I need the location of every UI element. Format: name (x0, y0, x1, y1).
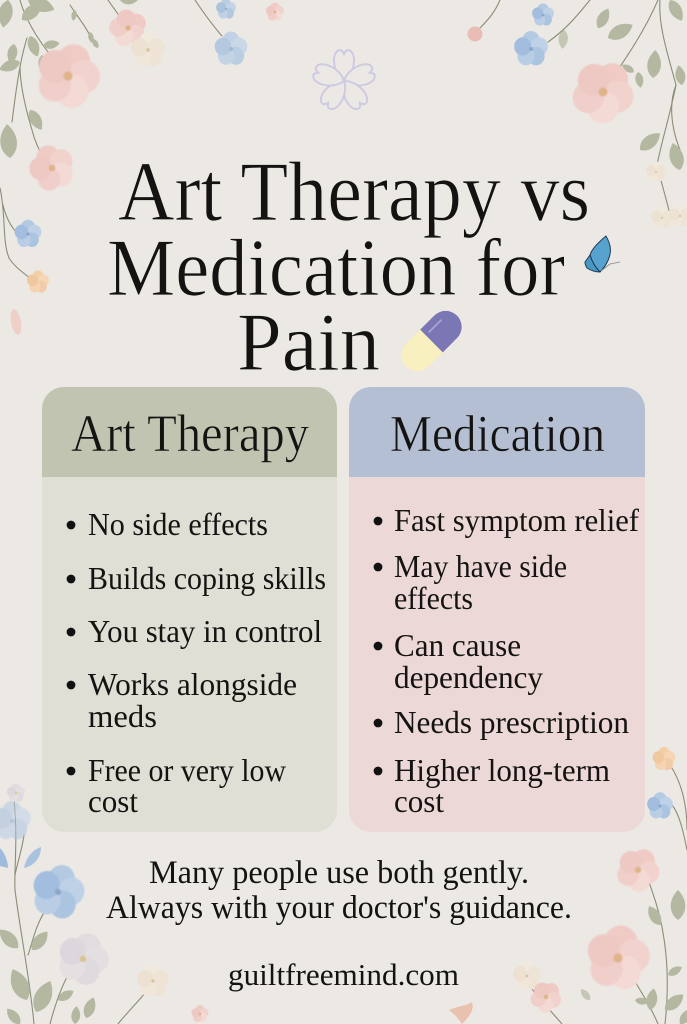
heading: medication: Medication (390, 406, 605, 463)
list: art therapy benefits: Free or very low (88, 752, 286, 788)
icon: pill capsule (395, 304, 468, 378)
flower: large pink right (562, 49, 646, 133)
flower: small blue bud (532, 3, 554, 26)
icon: outline flower (311, 50, 377, 112)
floral corner: bottom left (0, 783, 209, 1024)
flower: small pink (191, 1005, 209, 1022)
title (107, 145, 590, 388)
flower: orange (27, 270, 49, 293)
flower: cream (513, 961, 541, 989)
flower: cream edge (669, 204, 687, 227)
petal: pink (9, 308, 23, 336)
panel header: medication (349, 387, 645, 477)
list: medication traits: May have side (394, 548, 567, 584)
list: art therapy benefits: You stay in control (88, 613, 322, 649)
list: art therapy benefits: Works alongside (88, 666, 297, 702)
list: medication traits: dependency (394, 659, 543, 695)
list: medication traits: Fast symptom relief (394, 502, 639, 538)
title: Medication for (107, 222, 565, 313)
flower: pink small (525, 975, 568, 1018)
flower: small pink (23, 138, 80, 195)
flower: blue left edge (15, 220, 41, 247)
list: art therapy benefits: meds (88, 698, 157, 734)
title: Art Therapy vs (118, 145, 590, 239)
flower: small pink bud (468, 26, 482, 42)
bud: blue (558, 30, 569, 49)
icon: butterfly (585, 236, 620, 272)
bud: blue (24, 847, 41, 868)
floral corner: top right (468, 0, 687, 229)
panel: medication (349, 387, 645, 832)
list: art therapy benefits: No side effects (88, 506, 268, 542)
website url: guiltfreemind.com (228, 957, 459, 992)
flower: blue (647, 792, 673, 818)
heading: art therapy: Art Therapy (71, 405, 309, 463)
flower: pink large (582, 920, 655, 993)
flower: orange (653, 747, 675, 770)
list: art therapy benefits: Builds coping skills (88, 560, 326, 596)
flower: large pink (28, 34, 109, 115)
bud: blue edge (0, 848, 8, 868)
flower: tiny pink (266, 2, 284, 21)
flower: top pink (104, 3, 154, 52)
panel body: medication (349, 477, 645, 832)
list: art therapy benefits: cost (88, 783, 138, 819)
title: Pain (237, 296, 380, 388)
closing message: Always with your doctor's guidance. (106, 890, 572, 926)
flower: cream bud (646, 161, 666, 182)
flower: blue (27, 859, 90, 923)
flower: top cream (7, 783, 25, 802)
closing message (106, 855, 572, 926)
flower: pink upper (610, 840, 667, 898)
flower: blue (514, 31, 548, 65)
floral corner: bottom right (449, 747, 687, 1024)
flower: cream (137, 964, 169, 996)
list: medication traits: Higher long-term (394, 752, 610, 788)
list: medication traits: Needs prescription (394, 704, 629, 740)
list: art therapy benefits (67, 506, 326, 819)
list: medication traits (374, 502, 639, 819)
list: medication traits: Can cause (394, 627, 521, 663)
panel body: art therapy (42, 477, 337, 832)
floral corner: top left (0, 0, 284, 336)
flower: lavender white (51, 925, 116, 990)
flower: pale blue (215, 32, 247, 65)
list: medication traits: effects (394, 580, 473, 616)
flower: small blue (216, 0, 236, 19)
panel header: art therapy (42, 387, 337, 477)
panel: art therapy (42, 387, 337, 832)
flower: cream pair (651, 206, 673, 229)
flower: white-blue (0, 801, 31, 839)
flower: cream (131, 32, 165, 66)
list: medication traits: cost (394, 783, 444, 819)
flower: peach petal (449, 1002, 473, 1024)
closing message: Many people use both gently. (149, 855, 529, 891)
